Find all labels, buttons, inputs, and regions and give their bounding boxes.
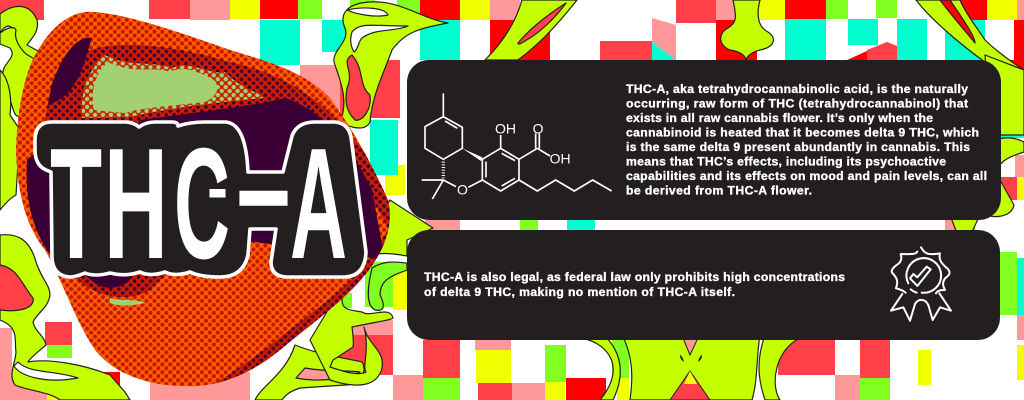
lower teeth glint	[110, 298, 145, 306]
icon: award ribbon with check	[891, 247, 951, 321]
green shape: top centre left	[334, 2, 448, 128]
title letters: -	[207, 149, 228, 228]
green shape: top left band	[0, 28, 36, 116]
title letters: T	[50, 115, 102, 292]
green shape: between cards	[950, 215, 980, 236]
green shape: centre right of lips	[310, 200, 433, 385]
green shape: bottom right arch	[759, 338, 800, 400]
green shape: top centre	[485, 0, 577, 60]
description text	[626, 82, 987, 198]
legal text	[424, 270, 845, 299]
description text: capabilities and its effects on mood and pain levels, can all	[626, 169, 987, 183]
panel: THC-A description	[407, 60, 1001, 220]
red triangle centre	[867, 42, 897, 60]
purple mouth shadow	[27, 98, 385, 260]
teeth halftone	[82, 55, 265, 118]
description text: means that THC’s effects, including its psychoactive	[626, 154, 946, 168]
green shape: bottom right of lips	[255, 345, 364, 400]
title letters: C	[174, 116, 230, 292]
description text: occurring, raw form of THC (tetrahydrocannabinol) that	[626, 96, 968, 110]
title letters: -	[232, 117, 295, 258]
green shape: top right	[916, 0, 1024, 72]
lower lip shading	[214, 228, 389, 384]
description text: be derived from THC-A flower.	[626, 184, 812, 198]
green shape: top left loop	[0, 6, 40, 70]
chemical structure: THC-A molecule	[422, 93, 612, 199]
hole: top centre left	[347, 8, 388, 16]
purple lower shadow	[85, 274, 130, 288]
title badge: THC-A	[35, 115, 366, 293]
hole: top centre	[518, 3, 566, 44]
lips halftone illustration	[16, 12, 390, 386]
bottom centre notches	[670, 338, 710, 400]
hole: bottom left	[14, 362, 78, 380]
green shape: left edge	[0, 70, 20, 210]
chemical structure: THC-A molecule: OH	[550, 151, 571, 167]
green shape: bottom centre	[622, 335, 760, 400]
description text: cannabinoid is heated that it becomes delta 9 THC, which	[626, 126, 979, 140]
green shape: right of card	[985, 55, 1024, 135]
hole: top right	[940, 0, 975, 43]
green shape: bottom left	[0, 235, 130, 400]
panel: legal status	[407, 230, 1000, 340]
legal text: THC-A is also legal, as federal law only prohibits high concentrations	[424, 270, 845, 284]
teeth	[93, 62, 217, 113]
green shape: bottom left arch	[582, 338, 620, 400]
description text: is the same delta 9 present abundantly in cannabis. This	[626, 140, 970, 154]
lower lip left shading	[76, 274, 166, 297]
purple upper blob	[48, 38, 92, 105]
title letters	[50, 115, 347, 293]
hole: bottom right of lips	[296, 368, 360, 380]
upper lip shading	[33, 44, 390, 228]
chemical structure: THC-A molecule: O	[533, 121, 544, 137]
title letters: A	[290, 116, 347, 292]
green shape: right arch	[990, 138, 1024, 217]
description text: exists in all raw cannabis flower. It’s only when the	[626, 111, 933, 125]
legal text: of delta 9 THC, making no mention of THC-A itself.	[424, 285, 735, 299]
chemical structure: THC-A molecule: O	[457, 182, 468, 198]
chemical structure: THC-A molecule: OH	[495, 121, 516, 137]
hole: top centre left lower	[351, 25, 408, 52]
green shape: tongue detail	[346, 55, 370, 120]
green shape: top drop	[721, 0, 773, 60]
description text: THC-A, aka tetrahydrocannabinolic acid, is the naturally	[626, 82, 968, 96]
title letters: H	[104, 116, 168, 293]
hole: arch	[368, 262, 407, 310]
